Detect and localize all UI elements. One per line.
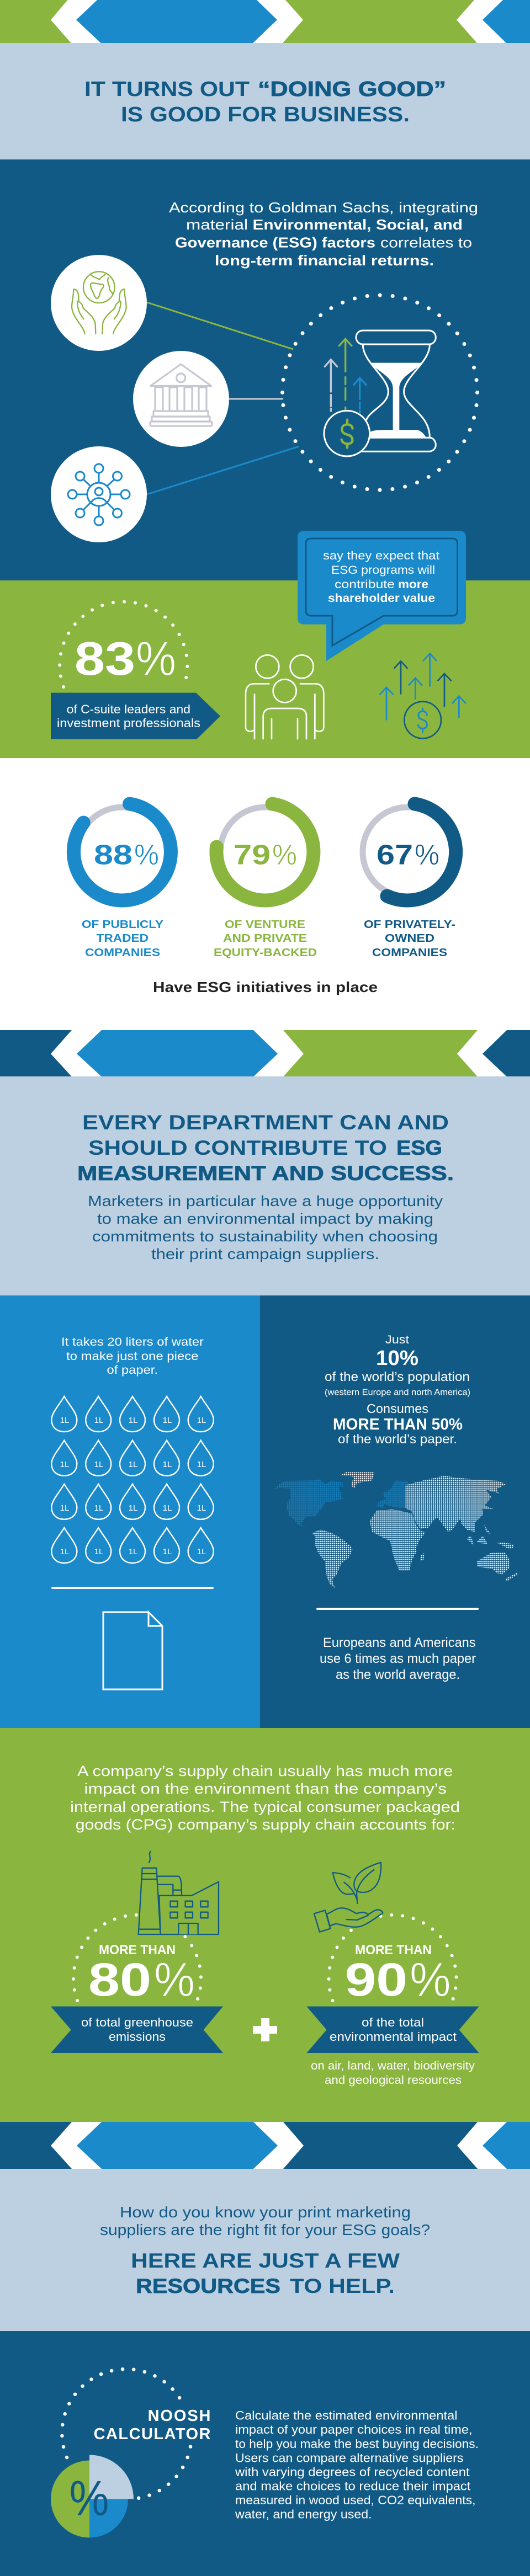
stat text: 10 percent: Consumes (367, 1401, 428, 1416)
paragraph: Marketers in particular have a huge opportunity (88, 1193, 443, 1209)
text: 20 liters: It takes 20 liters of water (61, 1336, 204, 1348)
icon: twenty water drops: 1L (163, 1503, 172, 1513)
intro text: long-term financial returns. (215, 252, 434, 269)
intro text (70, 1763, 460, 1833)
note text (311, 2060, 475, 2087)
intro text: According to Goldman Sachs, integrating (169, 199, 478, 216)
icon: twenty water drops: 1L (94, 1460, 103, 1469)
icon: percent pie: % (70, 2471, 109, 2526)
dotted arcs (62, 2369, 190, 2498)
speech bubble (298, 531, 466, 661)
ring chart: 79%: OF VENTURE (225, 919, 305, 931)
stat: 83%: 83 (75, 633, 135, 685)
stat: more than 90% (345, 1943, 451, 2007)
icon: twenty water drops: 1L (129, 1503, 137, 1513)
description text: and make choices to reduce their impact (235, 2479, 470, 2493)
icon: plus (253, 2018, 277, 2041)
text: six times: Europeans and Americans (323, 1635, 476, 1650)
text: six times: as the world average. (336, 1667, 460, 1682)
top chevron band (0, 0, 530, 43)
note text: on air, land, water, biodiversity (311, 2060, 475, 2072)
description text (235, 2409, 479, 2521)
icon: twenty water drops: 1L (129, 1547, 137, 1556)
intro text (169, 199, 478, 269)
ring chart: 79%: 79 (233, 839, 271, 871)
heading: Noosh Calculator (94, 2407, 211, 2443)
callout tag: investment professionals (57, 716, 200, 730)
title: “DOING GOOD” (258, 78, 446, 101)
question text: suppliers are the right fit for your ESG goals? (100, 2221, 430, 2238)
icon: twenty water drops: 1L (60, 1503, 69, 1513)
stat: more than 80%: % (154, 1953, 195, 2007)
stat: 83% (75, 631, 176, 686)
stat text: 10 percent: MORE THAN 50% (333, 1416, 463, 1433)
heading (77, 1111, 454, 1185)
ring chart: 67%: % (415, 839, 439, 871)
middle chevron band (0, 1030, 530, 1077)
icon: twenty water drops: 1L (60, 1547, 69, 1556)
title: IT TURNS OUT (84, 78, 250, 101)
paragraph: their print campaign suppliers. (151, 1246, 379, 1262)
ring chart: 79%: % (272, 839, 297, 871)
lower chevron band (0, 2122, 530, 2169)
icon: twenty water drops (51, 1396, 214, 1563)
text: six times (320, 1635, 476, 1682)
ribbon: greenhouse emissions: of total greenhouse (81, 2015, 193, 2029)
panel: Noosh calculator (0, 2331, 530, 2576)
ring chart: 67%: 67 (377, 839, 413, 871)
panel: world paper use (260, 1295, 530, 1728)
dotted world map (274, 1472, 518, 1588)
stat: 83%: % (136, 631, 176, 686)
icon: dollar with rising arrows (380, 653, 465, 738)
ring chart: 67% (363, 804, 456, 959)
ring chart: 88%: COMPANIES (85, 947, 160, 959)
dotted circle (283, 295, 477, 490)
speech bubble: say they expect that (323, 550, 439, 562)
ring chart: 88%: TRADED (96, 932, 149, 945)
intro text: correlates to (380, 234, 472, 250)
stat text: 10 percent: 10% (376, 1347, 418, 1370)
text: six times: use 6 times as much paper (320, 1651, 476, 1666)
dotted arc (60, 602, 187, 687)
stat: more than 80%: MORE THAN (99, 1943, 176, 1958)
icon: twenty water drops: 1L (163, 1460, 172, 1469)
icon: bank building (133, 351, 229, 447)
intro text: A company’s supply chain usually has much more (77, 1763, 453, 1779)
stat: more than 90%: % (410, 1953, 451, 2007)
icon: twenty water drops: 1L (60, 1416, 69, 1425)
paragraph: to make an environmental impact by making (97, 1210, 433, 1227)
ribbon: environmental impact: of the total (362, 2015, 424, 2029)
caption: Have ESG initiatives in place (153, 979, 378, 995)
intro text: Governance (ESG) factors (175, 234, 375, 250)
icon: twenty water drops: 1L (197, 1503, 206, 1513)
speech bubble: ESG programs will (331, 564, 435, 577)
ring chart: 79% (214, 804, 317, 959)
panel: water per paper (0, 1295, 260, 1728)
icon: social network (51, 446, 147, 542)
ring chart: 67%: OF PRIVATELY- (364, 919, 455, 931)
question text: How do you know your print marketing (120, 2204, 411, 2221)
icon: hands holding globe (51, 255, 147, 351)
panel: Goldman Sachs ESG (0, 159, 530, 580)
text: 20 liters: to make just one piece (66, 1350, 199, 1363)
callout tag: of C-suite leaders and (67, 702, 190, 716)
ring chart: 79%: AND PRIVATE (223, 932, 307, 945)
paragraph (88, 1193, 443, 1262)
callout tag (51, 693, 220, 739)
icon: twenty water drops: 1L (94, 1416, 103, 1425)
icon: percent pie (51, 2455, 134, 2538)
dotted arcs (73, 1915, 456, 2001)
question text (100, 2204, 430, 2238)
heading (131, 2249, 400, 2297)
text: 20 liters: of paper. (107, 1364, 158, 1377)
heading: Noosh Calculator: NOOSH (148, 2407, 211, 2425)
icon: sheet of paper (103, 1612, 162, 1689)
note text: and geological resources (325, 2074, 462, 2087)
speech bubble: contribute (335, 578, 395, 591)
ribbon: environmental impact (306, 2007, 479, 2053)
heading: MEASUREMENT AND SUCCESS. (77, 1162, 454, 1185)
icon: people (246, 655, 324, 739)
intro text: Environmental, Social, and (253, 216, 463, 233)
intro text: impact on the environment than the company’s (84, 1780, 447, 1797)
icon: twenty water drops: 1L (94, 1503, 103, 1513)
stat: more than 90%: 90 (345, 1954, 407, 2006)
title: IS GOOD FOR BUSINESS. (121, 103, 410, 126)
heading: HERE ARE JUST A FEW (131, 2249, 400, 2272)
icon: hand with plant (314, 1863, 383, 1932)
ring chart: 88%: OF PUBLICLY (82, 919, 164, 931)
text: 20 liters (61, 1336, 204, 1377)
icon: twenty water drops: 1L (163, 1547, 172, 1556)
heading: Noosh Calculator: CALCULATOR (94, 2425, 211, 2443)
icon: factory (139, 1852, 219, 1934)
stat: more than 90%: MORE THAN (355, 1943, 432, 1958)
ribbon: greenhouse emissions (51, 2007, 223, 2053)
intro text: material (186, 216, 248, 233)
panel: ESG initiatives rings (0, 758, 530, 1030)
panel: title (0, 0, 530, 194)
intro text: internal operations. The typical consumer packaged (70, 1799, 460, 1815)
description text: water, and energy used. (235, 2507, 372, 2521)
stat text: 10 percent: Just (385, 1334, 409, 1346)
description text: measured in wood used, CO2 equivalents, (235, 2493, 476, 2507)
ring chart: 67%: OWNED (385, 932, 434, 945)
icon: twenty water drops: 1L (197, 1416, 206, 1425)
icon: twenty water drops: 1L (129, 1416, 137, 1425)
ring chart: 88% (73, 804, 171, 959)
heading: ESG (396, 1137, 442, 1159)
icon: hourglass with dollar and arrows (324, 330, 436, 456)
heading: EVERY DEPARTMENT CAN AND (82, 1111, 449, 1134)
heading: TO HELP. (290, 2275, 395, 2297)
panel: 83 percent (0, 531, 530, 758)
ring chart: 67%: COMPANIES (372, 947, 447, 959)
heading: SHOULD CONTRIBUTE TO (88, 1137, 387, 1159)
paragraph: commitments to sustainability when choosing (92, 1228, 438, 1245)
ring chart: 88%: 88 (94, 839, 132, 871)
ribbon: greenhouse emissions: emissions (109, 2030, 166, 2044)
title (84, 78, 446, 126)
icon: twenty water drops: 1L (94, 1547, 103, 1556)
stat text: 10 percent: (western Europe and north America) (325, 1388, 470, 1398)
description text: with varying degrees of recycled content (235, 2465, 470, 2479)
icon: twenty water drops: 1L (163, 1416, 172, 1425)
connector lines (147, 302, 299, 494)
icon: twenty water drops: 1L (129, 1460, 137, 1469)
heading: RESOURCES (136, 2275, 280, 2297)
speech bubble: shareholder value (328, 592, 435, 605)
stat text: 10 percent: of the world’s paper. (338, 1432, 457, 1446)
stat text: 10 percent (325, 1334, 470, 1446)
icon: twenty water drops: 1L (60, 1460, 69, 1469)
stat: more than 80% (88, 1943, 195, 2007)
description text: impact of your paper choices in real time, (235, 2423, 473, 2436)
ribbon: environmental impact: environmental impact (330, 2030, 457, 2044)
icon: twenty water drops: 1L (197, 1460, 206, 1469)
stat text: 10 percent: of the world’s population (325, 1369, 470, 1384)
stat: more than 80%: 80 (88, 1954, 151, 2006)
speech bubble: more (398, 578, 428, 591)
panel: resources heading (0, 2169, 530, 2331)
ring chart: 79%: EQUITY-BACKED (214, 947, 317, 959)
intro text: goods (CPG) company’s supply chain accounts for: (76, 1816, 455, 1833)
panel: supply chain (0, 1728, 530, 2122)
description text: Users can compare alternative suppliers (235, 2451, 464, 2465)
ring chart: 88%: % (134, 839, 159, 871)
icon: twenty water drops: 1L (197, 1547, 206, 1556)
panel: every department (0, 1076, 530, 1295)
description text: Calculate the estimated environmental (235, 2409, 457, 2422)
description text: to help you make the best buying decisions. (235, 2437, 479, 2451)
